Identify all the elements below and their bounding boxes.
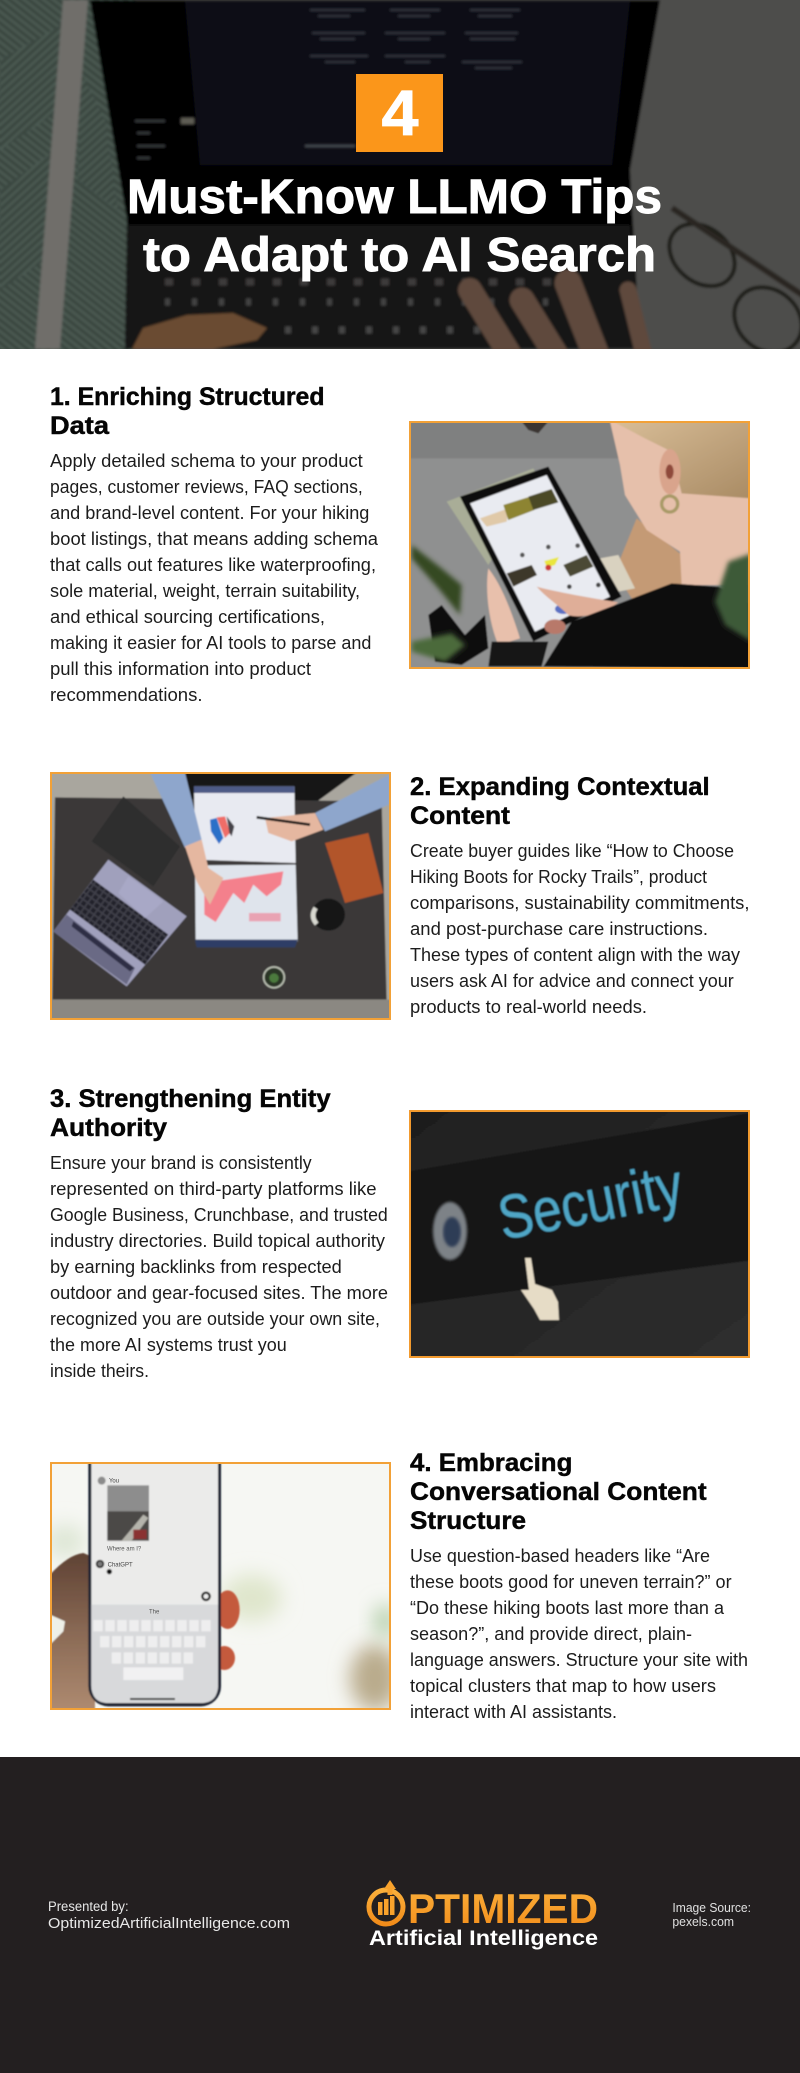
body text: tip 1: making it easier for AI tools to parse and — [50, 633, 371, 653]
body text: tip 2: These types of content align with the way — [410, 945, 740, 965]
panel: tip 1 enriching structured data — [50, 383, 755, 705]
heading: tip 4: Conversational Content — [410, 1478, 707, 1506]
logo: optimized artificial intelligence: Artificial Intelligence — [369, 1927, 598, 1950]
heading: tip 2: 2. Expanding Contextual — [410, 773, 710, 801]
heading: tip 4 — [410, 1449, 707, 1535]
logo: optimized artificial intelligence: PTIMIZED — [408, 1885, 598, 1932]
glasses — [666, 206, 800, 349]
body text: tip 3: inside theirs. — [50, 1361, 149, 1381]
presented by: OptimizedArtificialIntelligence.com — [48, 1915, 290, 1932]
screen text blur — [310, 10, 522, 68]
heading: tip 2: Content — [410, 802, 511, 830]
body text: tip 2: comparisons, sustainability commitments, — [410, 893, 750, 913]
body text: tip 1: and ethical sourcing certifications, — [50, 607, 325, 627]
orange number badge — [356, 74, 443, 152]
image source — [672, 1900, 751, 1929]
body text: tip 3: represented on third-party platforms like — [50, 1179, 376, 1199]
title: to Adapt to AI Search — [143, 229, 656, 282]
heading: tip 3 — [50, 1085, 331, 1142]
body text: tip 1: and brand-level content. For your hiking — [50, 503, 369, 523]
body text: tip 2 — [410, 841, 750, 1017]
heading: tip 1 — [50, 383, 324, 440]
body text: tip 2: Hiking Boots for Rocky Trails”, product — [410, 867, 707, 887]
body text: tip 1: boot listings, that means adding schema — [50, 529, 379, 549]
body text: tip 3: Ensure your brand is consistently — [50, 1153, 312, 1173]
body text: tip 1: Apply detailed schema to your product — [50, 451, 363, 471]
hands — [132, 313, 267, 349]
photo: phone with chat app: The — [149, 1609, 160, 1615]
panel: tip 2 expanding contextual content — [45, 768, 750, 1025]
body text: tip 3: Google Business, Crunchbase, and trusted — [50, 1205, 388, 1225]
body text: tip 2: products to real-world needs. — [410, 997, 647, 1017]
heading: tip 3: 3. Strengthening Entity — [50, 1085, 331, 1113]
heading: tip 1: 1. Enriching Structured — [50, 383, 324, 411]
title — [127, 171, 662, 282]
title: Must-Know LLMO Tips — [127, 171, 662, 224]
heading: tip 2 — [410, 773, 710, 830]
icon: ring with rising arrow and bars — [369, 1880, 403, 1924]
body text: tip 1: pages, customer reviews, FAQ sections, — [50, 477, 363, 497]
panel: tip 3 strengthening entity authority — [50, 1085, 755, 1381]
body text: tip 4: these boots good for uneven terrain?” or — [410, 1572, 732, 1592]
heading: tip 1: Data — [50, 412, 110, 440]
photo: phone with chat app: Where am I? — [107, 1547, 142, 1553]
body text: tip 3: the more AI systems trust you — [50, 1335, 287, 1355]
header banner — [0, 0, 800, 366]
photo: security on screen with cursor: Security — [493, 1151, 688, 1254]
photo: phone with chat app: ChatGPT — [108, 1562, 133, 1568]
body text: tip 3 — [50, 1153, 388, 1381]
presented by: Presented by: — [48, 1899, 129, 1914]
body text: tip 4: season?”, and provide direct, plain- — [410, 1624, 692, 1644]
photo: phone with chat app — [50, 1462, 391, 1710]
keyboard keys — [165, 278, 560, 286]
body text: tip 4: language answers. Structure your site with — [410, 1650, 748, 1670]
presented by — [48, 1899, 290, 1932]
body text: tip 4: “Do these hiking boots last more than a — [410, 1598, 725, 1618]
image source: Image Source: — [672, 1900, 751, 1915]
body text: tip 3: by earning backlinks from respected — [50, 1257, 342, 1277]
orange number badge: 4 — [382, 77, 419, 149]
body text: tip 3: industry directories. Build topical authority — [50, 1231, 385, 1251]
heading: tip 3: Authority — [50, 1114, 167, 1142]
header background photo: laptop on desk — [0, 0, 800, 366]
image source: pexels.com — [672, 1914, 734, 1929]
body text: tip 2: Create buyer guides like “How to Choose — [410, 841, 734, 861]
body text: tip 2: users ask AI for advice and connect your — [410, 971, 734, 991]
photo: security on screen with cursor — [405, 1105, 755, 1365]
heading: tip 4: 4. Embracing — [410, 1449, 572, 1477]
footer — [0, 1757, 800, 2073]
body text: tip 1: recommendations. — [50, 685, 202, 705]
photo: woman using tablet — [405, 415, 755, 675]
body text: tip 4: topical clusters that map to how users — [410, 1676, 716, 1696]
body text: tip 1: pull this information into product — [50, 659, 311, 679]
heading: tip 4: Structure — [410, 1507, 526, 1535]
body text: tip 1: that calls out features like waterproofing, — [50, 555, 376, 575]
body text: tip 2: and post-purchase care instructions. — [410, 919, 708, 939]
body text: tip 3: outdoor and gear-focused sites. The more — [50, 1283, 388, 1303]
body text: tip 4: Use question-based headers like “Are — [410, 1546, 710, 1566]
logo: optimized artificial intelligence — [369, 1880, 598, 1950]
body text: tip 4 — [410, 1546, 748, 1722]
photo: desk with laptop and charts — [45, 768, 395, 1025]
photo: phone with chat app: You — [109, 1479, 119, 1485]
panel: tip 4 embracing conversational content structure — [45, 1438, 748, 1722]
body text: tip 1 — [50, 451, 379, 705]
body text: tip 4: interact with AI assistants. — [410, 1702, 617, 1722]
body text: tip 1: sole material, weight, terrain suitability, — [50, 581, 360, 601]
body text: tip 3: recognized you are outside your own site, — [50, 1309, 380, 1329]
